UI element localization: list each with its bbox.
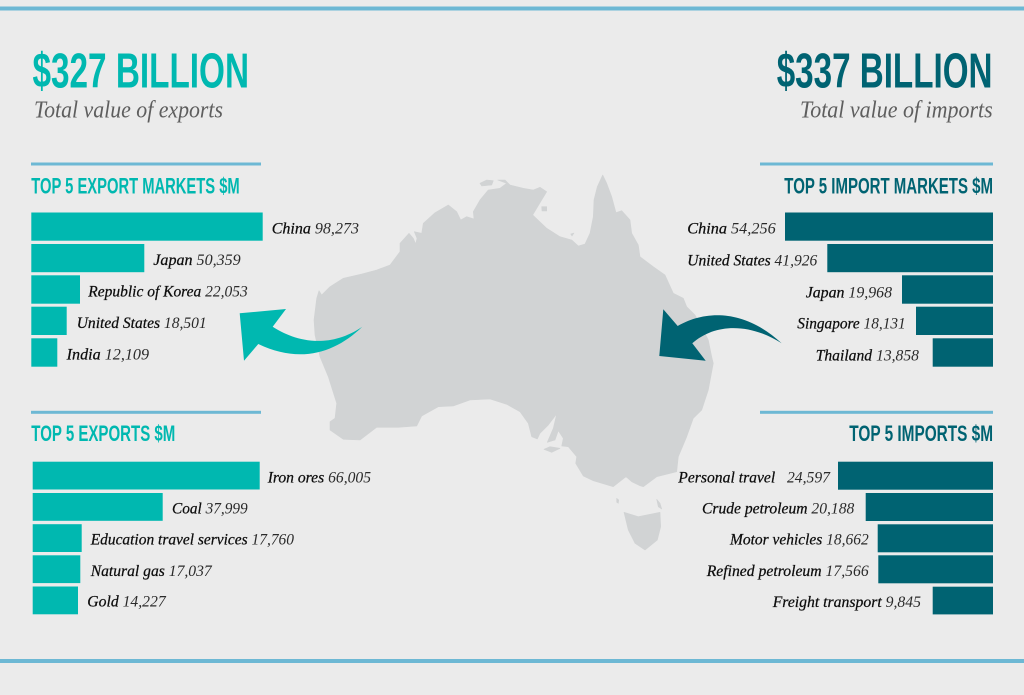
bar chart: export markets: India 12,109 [66, 346, 149, 363]
exports total: Total value of exports [34, 97, 223, 123]
bar chart: import markets: Thailand 13,858 [816, 347, 919, 364]
bar chart: imports: Motor vehicles 18,662 [729, 532, 869, 549]
imports total [777, 44, 993, 123]
bar chart: exports: Natural gas 17,037 [90, 563, 213, 580]
imports total: Total value of imports [800, 97, 993, 123]
bar chart: export markets [31, 212, 359, 367]
bar chart: import markets: Singapore 18,131 [797, 316, 906, 333]
bar chart: export markets: United States 18,501 [77, 315, 207, 332]
arrow: exports leaving [240, 309, 362, 361]
bar chart: export markets: Japan 50,359 [153, 252, 241, 269]
heading: top 5 export markets: TOP 5 EXPORT MARKETS $M [31, 173, 240, 198]
exports total [32, 44, 249, 123]
heading: top 5 exports: TOP 5 EXPORTS $M [31, 421, 175, 446]
panel: top 5 import markets [687, 162, 993, 367]
panel: top 5 export markets [31, 162, 359, 367]
bar chart: exports: Iron ores 66,005 [267, 469, 371, 486]
bar chart: imports: Freight transport 9,845 [772, 594, 921, 611]
bar chart: imports [677, 462, 993, 614]
panel: top 5 imports [677, 411, 993, 614]
bar chart: export markets: Republic of Korea 22,053 [87, 284, 248, 301]
bar chart: exports: Gold 14,227 [87, 594, 167, 611]
arrow: imports arriving [659, 309, 782, 361]
bar chart: import markets: China 54,256 [687, 221, 776, 238]
bar chart: exports: Education travel services 17,760 [90, 532, 294, 549]
bar chart: import markets: Japan 19,968 [806, 284, 892, 301]
bar chart: imports: Crude petroleum 20,188 [702, 501, 854, 518]
bar chart: imports: Personal travel 24,597 [677, 469, 831, 486]
panel: top 5 exports [31, 411, 371, 614]
bar chart: import markets: United States 41,926 [687, 252, 817, 269]
map: Australia [314, 175, 713, 550]
bar chart: export markets: China 98,273 [272, 221, 359, 238]
bar chart: exports [33, 462, 371, 614]
bar chart: exports: Coal 37,999 [172, 500, 248, 517]
bar chart: imports: Refined petroleum 17,566 [706, 563, 869, 580]
exports total: $327 BILLION [32, 44, 249, 98]
bar chart: import markets [687, 212, 993, 367]
